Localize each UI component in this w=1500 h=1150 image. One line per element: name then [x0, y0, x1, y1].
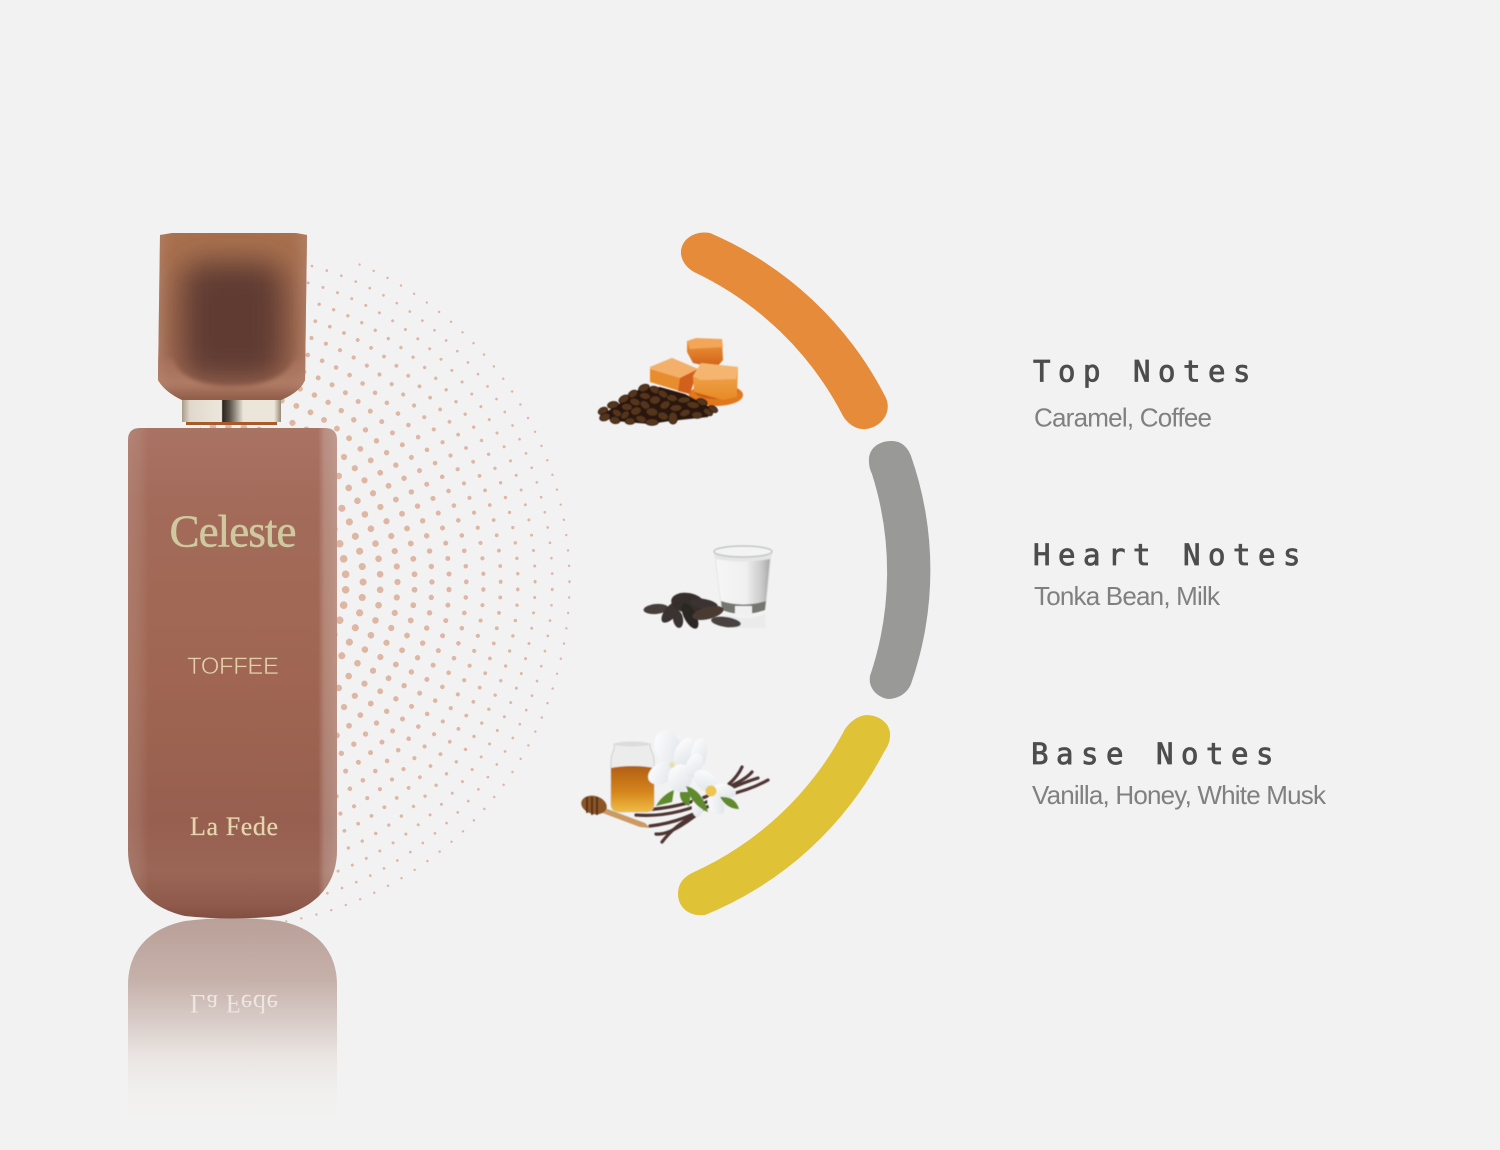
caramel cube back [687, 338, 723, 368]
heading: Top Notes: Top Notes [1033, 354, 1258, 388]
heading: Base Notes: Base Notes [1031, 737, 1281, 771]
arc: heart notes [869, 441, 930, 699]
metal collar [182, 400, 281, 425]
halftone dot pattern [200, 263, 571, 922]
icon: honey, white flowers and vanilla [579, 727, 768, 842]
text block: top notes [1033, 354, 1258, 432]
icon: tonka beans and milk glass [643, 546, 772, 631]
ingredients: Tonka Bean, Milk: Tonka Bean, Milk [1034, 581, 1221, 611]
bottle body [128, 428, 337, 922]
text block: heart notes [1033, 538, 1308, 611]
flower stamen [706, 786, 716, 796]
perfume bottle [128, 228, 337, 922]
text block: base notes [1031, 737, 1327, 810]
label: TOFFEE: TOFFEE [187, 653, 279, 680]
tonka beans [643, 590, 742, 631]
honey jar [611, 742, 654, 812]
arc: base notes [678, 715, 890, 915]
syrup [689, 383, 743, 406]
arc: top notes [681, 232, 888, 429]
coffee beans [597, 383, 719, 425]
bottle reflection [128, 918, 337, 1130]
leaves [656, 786, 739, 812]
bottle reflection: La Fede [190, 989, 278, 1018]
caramel cube left [650, 358, 698, 394]
caramel cube right [693, 363, 738, 400]
white flowers [644, 727, 737, 818]
heading: Heart Notes: Heart Notes [1033, 538, 1308, 572]
milk glass [714, 546, 772, 628]
vanilla pods [636, 767, 768, 842]
bottle cap [158, 233, 307, 400]
ingredients: Caramel, Coffee: Caramel, Coffee [1034, 402, 1212, 432]
label: Celeste: Celeste [170, 506, 296, 556]
label: La Fede: La Fede [190, 812, 278, 841]
icon: caramel and coffee beans [597, 338, 743, 425]
honey dipper [579, 793, 650, 828]
ingredients: Vanilla, Honey, White Musk: Vanilla, Honey, White Musk [1032, 780, 1327, 810]
